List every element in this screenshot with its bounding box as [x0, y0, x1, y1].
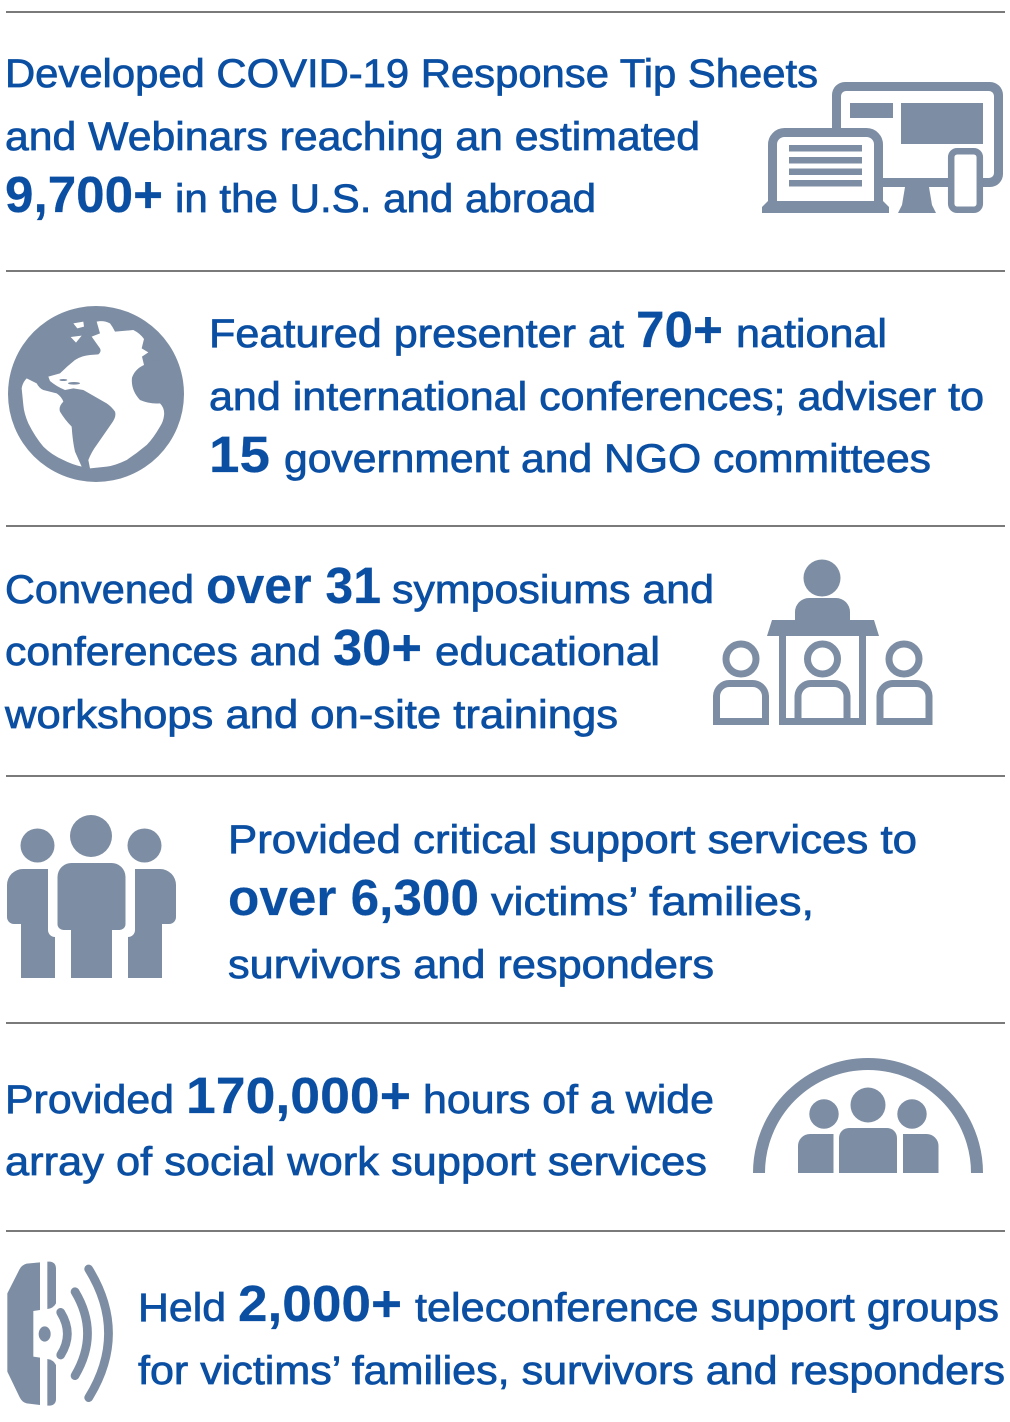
panel: COVID-19 tip sheets and webinars: [5, 52, 1003, 223]
text block: convened events: 30+: [333, 619, 422, 676]
text block: convened events: Convened: [5, 568, 194, 612]
text block: COVID-19 response reach: in the U.S. and abroad: [175, 177, 596, 221]
icon: three people: [7, 815, 176, 978]
text block: teleconference groups: for victims’ families, survivors and responders: [138, 1349, 1005, 1393]
panel: presenter and adviser: [8, 301, 984, 483]
text block: convened events: conferences and: [5, 630, 321, 674]
text block: COVID-19 response reach: [5, 52, 818, 223]
icon: group under a dome: [759, 1064, 977, 1173]
text block: conferences and committees: [209, 301, 984, 483]
text block: conferences and committees: Featured presenter at: [209, 312, 624, 356]
text block: convened events: symposiums and: [392, 568, 714, 612]
text block: convened events: workshops and on-site trainings: [4, 693, 618, 737]
text block: teleconference groups: teleconference support groups: [415, 1286, 999, 1330]
icon: presenter at lectern with audience: [716, 560, 929, 725]
text block: conferences and committees: government and NGO committees: [284, 437, 931, 481]
text block: hours of support: Provided: [5, 1078, 174, 1122]
text block: teleconference groups: Held: [138, 1286, 226, 1330]
text block: convened events: over 31: [206, 557, 381, 614]
text block: hours of support: hours of a wide: [423, 1078, 714, 1122]
text block: support services reach: [228, 818, 917, 987]
text block: teleconference groups: [138, 1275, 1005, 1393]
icon: globe: [8, 306, 184, 482]
text block: teleconference groups: 2,000+: [238, 1275, 402, 1332]
icon: telephone handset with sound waves: [7, 1262, 108, 1406]
text block: support services reach: Provided critical support services to: [228, 818, 917, 862]
text block: hours of support: [5, 1067, 714, 1184]
panel: teleconference support groups: [7, 1262, 1005, 1406]
text block: support services reach: victims’ families,: [491, 880, 814, 924]
panel: symposiums and workshops: [4, 557, 929, 737]
panel: social work hours: [5, 1064, 977, 1184]
icon: desktop, laptop and phone: [762, 82, 1003, 213]
text block: conferences and committees: and international conferences; adviser to: [209, 375, 984, 419]
text block: support services reach: over 6,300: [228, 869, 479, 926]
text block: conferences and committees: 15: [209, 426, 270, 483]
text block: hours of support: array of social work support services: [5, 1140, 707, 1184]
text block: conferences and committees: national: [736, 312, 887, 356]
text block: COVID-19 response reach: and Webinars reaching an estimated: [5, 115, 700, 159]
text block: hours of support: 170,000+: [186, 1067, 411, 1124]
text block: convened events: [4, 557, 714, 737]
text block: COVID-19 response reach: Developed COVID-19 Response Tip Sheets: [5, 52, 818, 96]
text block: conferences and committees: 70+: [636, 301, 723, 358]
panel: critical support services: [7, 815, 917, 987]
text block: convened events: educational: [435, 630, 660, 674]
text block: COVID-19 response reach: 9,700+: [5, 166, 163, 223]
text block: support services reach: survivors and responders: [228, 943, 714, 987]
